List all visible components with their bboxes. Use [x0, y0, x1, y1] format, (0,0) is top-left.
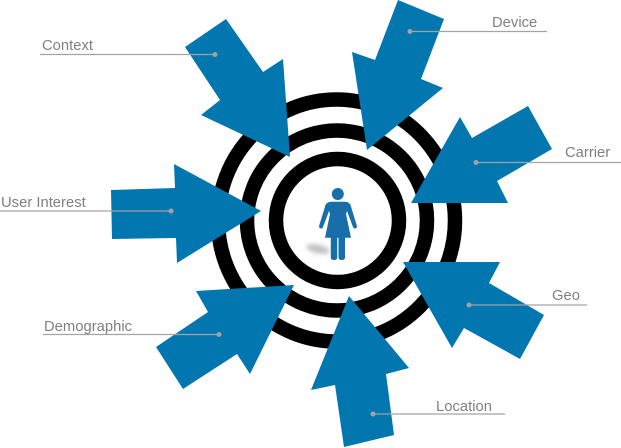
arrow: geo: [403, 262, 544, 359]
label: user interest: User Interest: [1, 195, 86, 211]
arrows: [111, 0, 552, 447]
label: context: Context: [42, 38, 93, 54]
label: device: Device: [492, 15, 537, 31]
label: demographic: [43, 319, 222, 337]
label: context: [40, 38, 218, 57]
label: carrier: [474, 145, 621, 165]
arrow: location: [311, 296, 409, 447]
arrow: user interest: [111, 164, 261, 263]
label: demographic: Demographic: [44, 319, 133, 335]
label: carrier: Carrier: [565, 145, 610, 161]
person figure with shadow: [305, 188, 357, 260]
label: device: [408, 15, 547, 34]
arrow: device: [352, 0, 444, 150]
label: location: Location: [436, 399, 492, 415]
label: user interest: [0, 195, 174, 214]
arrow: carrier: [411, 106, 552, 203]
concentric target rings: [218, 100, 455, 342]
arrow: context: [185, 19, 290, 157]
label: location: [370, 399, 505, 416]
arrow: demographic: [156, 285, 294, 389]
label: geo: [466, 288, 587, 308]
label: geo: Geo: [552, 288, 580, 304]
